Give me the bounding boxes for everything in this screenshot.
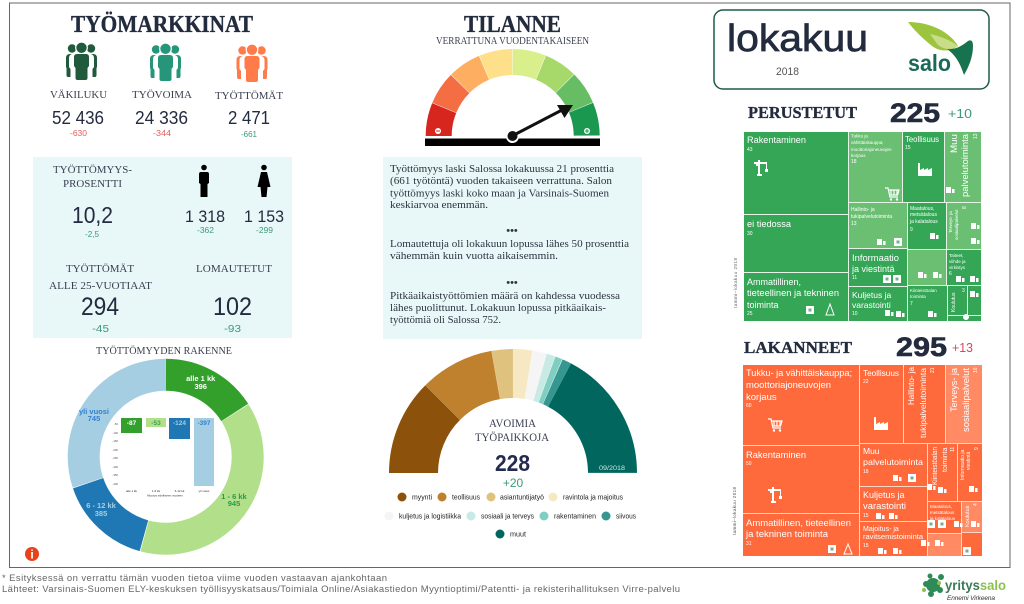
stat: naiset: -299	[256, 226, 274, 235]
logo: yrityssalo	[922, 574, 1006, 602]
chart: treemap perustetut: tieteellinen ja tekninen	[747, 288, 839, 298]
stat: työttömät: -661	[241, 130, 258, 139]
stat: miehet: -362	[197, 226, 215, 235]
chart: treemap lakanneet: 15	[863, 543, 869, 549]
chart: treemap lakanneet: 11	[950, 447, 956, 452]
heading: perustetut: 225	[890, 98, 940, 128]
chart: muutos bar chart: -250	[112, 456, 118, 460]
heading: lakanneet: +13	[952, 340, 973, 355]
stat: työttömyysprosentti: 10,2	[72, 202, 113, 228]
legend: avoimet työpaikat: ravintola ja majoitus	[563, 492, 623, 502]
panel: työttömyysluvut	[33, 157, 292, 338]
chart: treemap perustetut: 13	[851, 221, 857, 227]
text block: työttömyys	[390, 163, 614, 211]
footer: notes: Lähteet: Varsinais-Suomen ELY-keskuksen työllisyyskatsaus/Toimiala Online/Asiakastiedon Myyntioptimi/Patentti- ja rekisterihallituksen Virre-palvelu	[2, 584, 680, 595]
chart: treemap perustetut: ja viestintä	[851, 264, 895, 274]
stat: miehet: 1 318	[185, 207, 225, 226]
heading: perustetut	[748, 98, 972, 128]
heading: lakanneet	[744, 332, 973, 362]
chart: treemap lakanneet: toiminta	[942, 447, 949, 472]
panel: tilanne heading: TILANNE	[464, 12, 561, 38]
chart: treemap perustetut: toiminta	[747, 300, 779, 310]
stat: alle 25-vuotiaat: ALLE 25-VUOTIAAT	[49, 281, 153, 292]
footer: notes: * Esityksessä on verrattu tämän vuoden tietoa viime vuoden vastaavan ajankohtaan	[2, 573, 387, 584]
chart: treemap perustetut: 11	[852, 275, 857, 281]
stat: alle 25-vuotiaat: TYÖTTÖMÄT	[66, 263, 135, 275]
text block: pitkäaikaistyöttömät: työttömiä oli Salossa 752.	[390, 314, 501, 326]
chart: treemap lakanneet: 9	[974, 447, 980, 450]
text block: pitkäaikaistyöttömät: •••	[506, 277, 518, 289]
stat: alle 25-vuotiaat	[49, 263, 153, 335]
chart: muutos bar chart: alle 1 kk	[126, 489, 137, 493]
chart: treemap perustetut: tukipalvelutoiminta	[851, 214, 892, 220]
chart: avoimia työpaikkoja half donut: AVOIMIA	[489, 416, 536, 430]
chart: muutos bar chart: yli vuosi	[199, 489, 210, 493]
heading: lakanneet: LAKANNEET	[744, 338, 853, 357]
stat: työttömyysprosentti: TYÖTTÖMYYS-	[53, 164, 133, 176]
panel: logo lokakuu	[714, 10, 989, 89]
stat: miehet	[185, 207, 225, 235]
chart: treemap perustetut: Kiinteistöalan	[910, 288, 937, 293]
chart: treemap lakanneet: ja tekninen toiminta	[745, 529, 829, 540]
chart: treemap perustetut: 30	[747, 231, 753, 237]
icon: woman	[258, 165, 270, 197]
chart: gauge	[408, 31, 617, 241]
text block: lomautetut: vähemmän kuin vuotta aikaisemmin.	[390, 250, 558, 262]
chart: treemap perustetut: ja kalatalous	[909, 219, 938, 225]
chart: muutos bar chart: -124	[173, 420, 186, 427]
chart: treemap lakanneet: Teollisuus	[863, 368, 899, 378]
chart: avoimia työpaikkoja half donut: 228	[495, 450, 530, 476]
heading: työttömyyden rakenne: TYÖTTÖMYYDEN RAKENNE	[96, 345, 232, 357]
chart: treemap perustetut: Koulutus	[951, 292, 957, 312]
chart: avoimia työpaikkoja half donut	[372, 332, 654, 604]
chart: treemap lakanneet: 4	[973, 503, 979, 506]
chart: treemap perustetut: 10	[852, 311, 858, 317]
chart: treemap lakanneet: ja kalatalous	[929, 516, 956, 521]
chart: muutos bar chart: 1-6 kk	[152, 489, 161, 493]
chart: treemap perustetut	[744, 132, 981, 321]
heading: työmarkkinat: TYÖMARKKINAT	[71, 12, 253, 38]
stat: työttömät: 2 471	[228, 108, 270, 128]
chart: treemap perustetut: palvelutoiminta	[960, 134, 970, 197]
chart: treemap lakanneet: 50	[746, 461, 752, 467]
panel: työmarkkinat	[50, 12, 283, 139]
logo: salo: salo	[908, 50, 951, 76]
text block: pitkäaikaistyöttömät: Pitkäaikaistyöttömien määrä on kahdessa vuodessa	[390, 290, 620, 302]
chart: treemap perustetut: varastointi	[852, 300, 891, 310]
chart: treemap lakanneet: viestintä	[966, 451, 972, 470]
stat: alle 25-vuotiaat: 294	[81, 293, 119, 321]
chart: treemap perustetut: 43	[747, 147, 753, 153]
stat: työttömät: TYÖTTÖMÄT	[215, 90, 283, 102]
chart: donut työttömyyden rakenne: 745	[88, 414, 100, 423]
legend: avoimet työpaikat: sosiaali ja terveys	[481, 512, 534, 520]
chart: treemap perustetut: Taiteet,	[949, 253, 964, 258]
icons: lakanneet	[768, 417, 980, 555]
stat: työttömyysprosentti: PROSENTTI	[63, 179, 123, 190]
chart: treemap lakanneet: moottoriajoneuvojen	[746, 380, 831, 391]
chart: muutos bar chart: -200	[112, 448, 118, 452]
stat: naiset: 1 153	[244, 207, 284, 226]
year: 2018	[776, 66, 799, 78]
chart: treemap perustetut: 25	[747, 311, 753, 317]
chart: muutos bar chart: -400	[112, 482, 118, 486]
text block: pitkäaikaistyöttömät	[390, 277, 620, 326]
chart: donut työttömyyden rakenne: yli vuosi	[79, 407, 109, 416]
icon: info	[25, 547, 39, 562]
chart: treemap lakanneet: Maatalous,	[930, 504, 952, 509]
text block: lomautetut: •••	[506, 225, 518, 237]
chart: treemap perustetut: vähittäiskauppa;	[851, 140, 884, 145]
stat: lomautetut: -93	[224, 324, 242, 335]
chart: avoimia työpaikkoja half donut: 09/2018	[599, 465, 625, 472]
chart: treemap lakanneet: Informaatio ja	[960, 449, 966, 480]
chart: treemap perustetut: viihde ja	[949, 259, 966, 264]
chart: treemap lakanneet: 22	[863, 379, 869, 385]
chart: treemap perustetut: 18	[851, 159, 857, 165]
chart: treemap perustetut: 15	[905, 145, 911, 151]
stat: väkiluku	[50, 42, 107, 138]
stat: työvoima: TYÖVOIMA	[132, 89, 192, 101]
chart: treemap perustetut: 3	[962, 288, 965, 294]
icon: man	[199, 165, 209, 197]
chart: treemap lakanneet: Muu	[863, 446, 880, 456]
chart: donut työttömyyden rakenne: 945	[228, 499, 240, 508]
chart: treemap lakanneet: tukipalvelutoiminta	[918, 368, 928, 438]
text block: lomautetut	[390, 225, 629, 262]
title: lokakuu: lokakuu	[727, 18, 868, 60]
chart: muutos bar chart: -300	[112, 465, 118, 469]
chart: treemap lakanneet: 16	[973, 367, 979, 373]
chart: treemap lakanneet: Tukku- ja vähittäiskauppa;	[746, 368, 852, 379]
chart: treemap lakanneet: Hallinto- ja	[906, 367, 916, 405]
chart: muutos bar chart: Muutos edelliseen vuoteen	[147, 494, 183, 498]
legend: avoimet työpaikat	[384, 492, 636, 538]
chart: muutos bar chart: -53	[151, 420, 161, 427]
legend: avoimet työpaikat: kuljetus ja logistiikka	[399, 512, 462, 520]
chart: treemap lakanneet: varastointi	[863, 501, 906, 511]
footer: notes	[2, 573, 680, 595]
chart: treemap perustetut: Informaatio	[852, 253, 899, 263]
logo: yrityssalo: yrityssalo	[945, 578, 1006, 593]
chart: donut työttömyyden rakenne: alle 1 kk	[186, 374, 216, 383]
chart: treemap lakanneet: sosiaalipalvelut	[961, 367, 971, 432]
chart: treemap perustetut: Hallinto- ja	[851, 207, 875, 213]
chart: treemap perustetut: Teollisuus	[905, 135, 939, 144]
legend: avoimet työpaikat: rakentaminen	[554, 512, 596, 520]
chart: muutos bar chart: -150	[112, 439, 118, 443]
chart: donut työttömyyden rakenne: 385	[95, 509, 107, 518]
chart: treemap perustetut: Terveys- ja	[948, 211, 953, 233]
text block: työttömyys: Työttömyys laski Salossa lokakuussa 21 prosenttia	[390, 163, 614, 175]
chart: muutos bar chart: -100	[112, 431, 118, 435]
chart: treemap lakanneet: Terveys- ja	[949, 368, 959, 412]
chart: treemap perustetut: sosiaalipalvelut	[954, 209, 959, 240]
chart: donut työttömyyden rakenne: 396	[194, 382, 207, 391]
chart: treemap perustetut: 13	[973, 133, 979, 139]
chart: treemap perustetut: virkistys	[949, 265, 966, 270]
chart: treemap perustetut: Ammatillinen,	[747, 277, 801, 287]
stat: väkiluku: -630	[70, 129, 88, 138]
chart: treemap lakanneet: Majoitus- ja	[863, 526, 899, 533]
stat: lomautetut: LOMAUTETUT	[196, 264, 273, 275]
text block: työttömyys: työttömyys laski koko maan ja Varsinais-Suomen	[390, 188, 609, 200]
stat: työttömyysprosentti: -2,5	[85, 230, 100, 239]
chart: treemap lakanneet: metsätalous	[930, 510, 955, 515]
chart: treemap perustetut: 7	[910, 301, 913, 307]
chart: treemap lakanneet: Ammatillinen, tieteellinen	[746, 518, 851, 529]
chart: muutos bar chart: -350	[112, 473, 118, 477]
chart: treemap perustetut: moottoriajoneuvojen	[851, 147, 892, 152]
stat: väkiluku: 52 436	[52, 108, 104, 128]
stat: työvoima	[132, 43, 192, 138]
stat: väkiluku: VÄKILUKU	[50, 89, 107, 101]
chart: muutos bar chart	[112, 418, 214, 498]
chart: donut työttömyyden rakenne	[53, 344, 279, 570]
chart: treemap lakanneet: 60	[746, 403, 752, 409]
panel: tilanne heading: VERRATTUNA VUODENTAKAISEEN	[436, 36, 589, 47]
stat: työvoima: -344	[153, 129, 172, 138]
chart: treemap perustetut: Kuljetus ja	[852, 290, 891, 300]
chart: treemap lakanneet: Rakentaminen	[746, 450, 806, 461]
chart: treemap perustetut: 6	[949, 271, 952, 277]
chart: treemap perustetut: toiminta	[910, 294, 926, 299]
caption: perustetut period: tammi–lokakuu 2018	[733, 258, 738, 308]
chart: muutos bar chart: -50	[114, 422, 118, 426]
chart: treemap perustetut: korjaus	[851, 153, 866, 158]
chart: treemap perustetut: Tukku ja	[851, 134, 868, 138]
stat: naiset	[244, 207, 284, 235]
chart: muutos bar chart: -87	[127, 420, 137, 427]
chart: treemap perustetut: 9	[910, 227, 913, 233]
chart: treemap lakanneet: korjaus	[746, 392, 777, 403]
text block: työttömyys: keskiarvoa enemmän.	[390, 199, 488, 211]
logo: salo	[908, 22, 973, 76]
heading: lakanneet: 295	[896, 332, 947, 362]
chart: treemap perustetut: Maatalous,	[910, 206, 934, 212]
chart: treemap lakanneet	[743, 365, 982, 556]
chart: treemap lakanneet: 31	[746, 541, 752, 547]
text block: lomautetut: Lomautettuja oli lokakuun lopussa lähes 50 prosenttia	[390, 238, 629, 250]
chart: avoimia työpaikkoja half donut: +20	[503, 476, 524, 490]
text block: pitkäaikaistyöttömät: lähes puolittunut. Lokakuun lopussa pitkäaikais-	[390, 302, 606, 314]
chart: avoimia työpaikkoja half donut: TYÖPAIKKOJA	[475, 430, 549, 444]
text block: työttömyys: (661 työtöntä) vuoden takaiseen verrattuna. Salon	[390, 175, 613, 187]
stat: alle 25-vuotiaat: -45	[92, 324, 110, 335]
icon: info: i	[30, 548, 34, 562]
chart: donut työttömyyden rakenne: 1 - 6 kk	[221, 492, 248, 501]
chart: muutos bar chart: 6-12 kk	[175, 489, 185, 493]
stat: työttömät	[215, 44, 283, 139]
chart: treemap perustetut: Rakentaminen	[747, 135, 806, 145]
chart: treemap lakanneet: 18	[863, 469, 869, 475]
legend: avoimet työpaikat: muut	[510, 530, 527, 538]
panel: tilanne text	[383, 157, 642, 339]
chart: treemap lakanneet: 15	[863, 513, 869, 519]
chart: treemap lakanneet: Kiinteistöalan	[932, 447, 939, 485]
chart: muutos bar chart: -397	[197, 420, 211, 427]
chart: treemap lakanneet: Koulutus	[965, 505, 971, 527]
stat: työttömyysprosentti	[53, 164, 133, 239]
legend: avoimet työpaikat: myynti	[412, 492, 432, 502]
logo: yrityssalo: Ennemi Virkeena	[947, 595, 995, 602]
stat: työvoima: 24 336	[135, 108, 188, 128]
legend: avoimet työpaikat: siivous	[616, 512, 636, 520]
chart: treemap lakanneet: palvelutoiminta	[863, 457, 923, 467]
legend: avoimet työpaikat: teollisuus	[452, 492, 480, 502]
chart: donut työttömyyden rakenne: 6 - 12 kk	[86, 501, 117, 510]
chart: treemap lakanneet: 21	[930, 367, 936, 373]
panel: tilanne heading	[436, 12, 589, 47]
caption: lakanneet period: tammi–lokakuu 2018	[732, 487, 737, 535]
chart: treemap perustetut: ei tiedossa	[747, 219, 791, 229]
icons: perustetut	[754, 160, 980, 320]
chart: treemap perustetut: 8	[962, 206, 968, 209]
legend: avoimet työpaikat: asiantuntijatyö	[500, 492, 544, 502]
chart: treemap perustetut: Muu	[949, 134, 959, 153]
stat: lomautetut: 102	[213, 293, 252, 321]
heading: perustetut: +10	[948, 106, 972, 121]
chart: treemap lakanneet: ravitsemistoiminta	[863, 534, 923, 541]
stat: lomautetut	[196, 264, 273, 335]
heading: perustetut: PERUSTETUT	[748, 103, 858, 122]
chart: treemap perustetut: metsätalous	[910, 212, 937, 218]
chart: treemap lakanneet: Kuljetus ja	[863, 490, 905, 500]
